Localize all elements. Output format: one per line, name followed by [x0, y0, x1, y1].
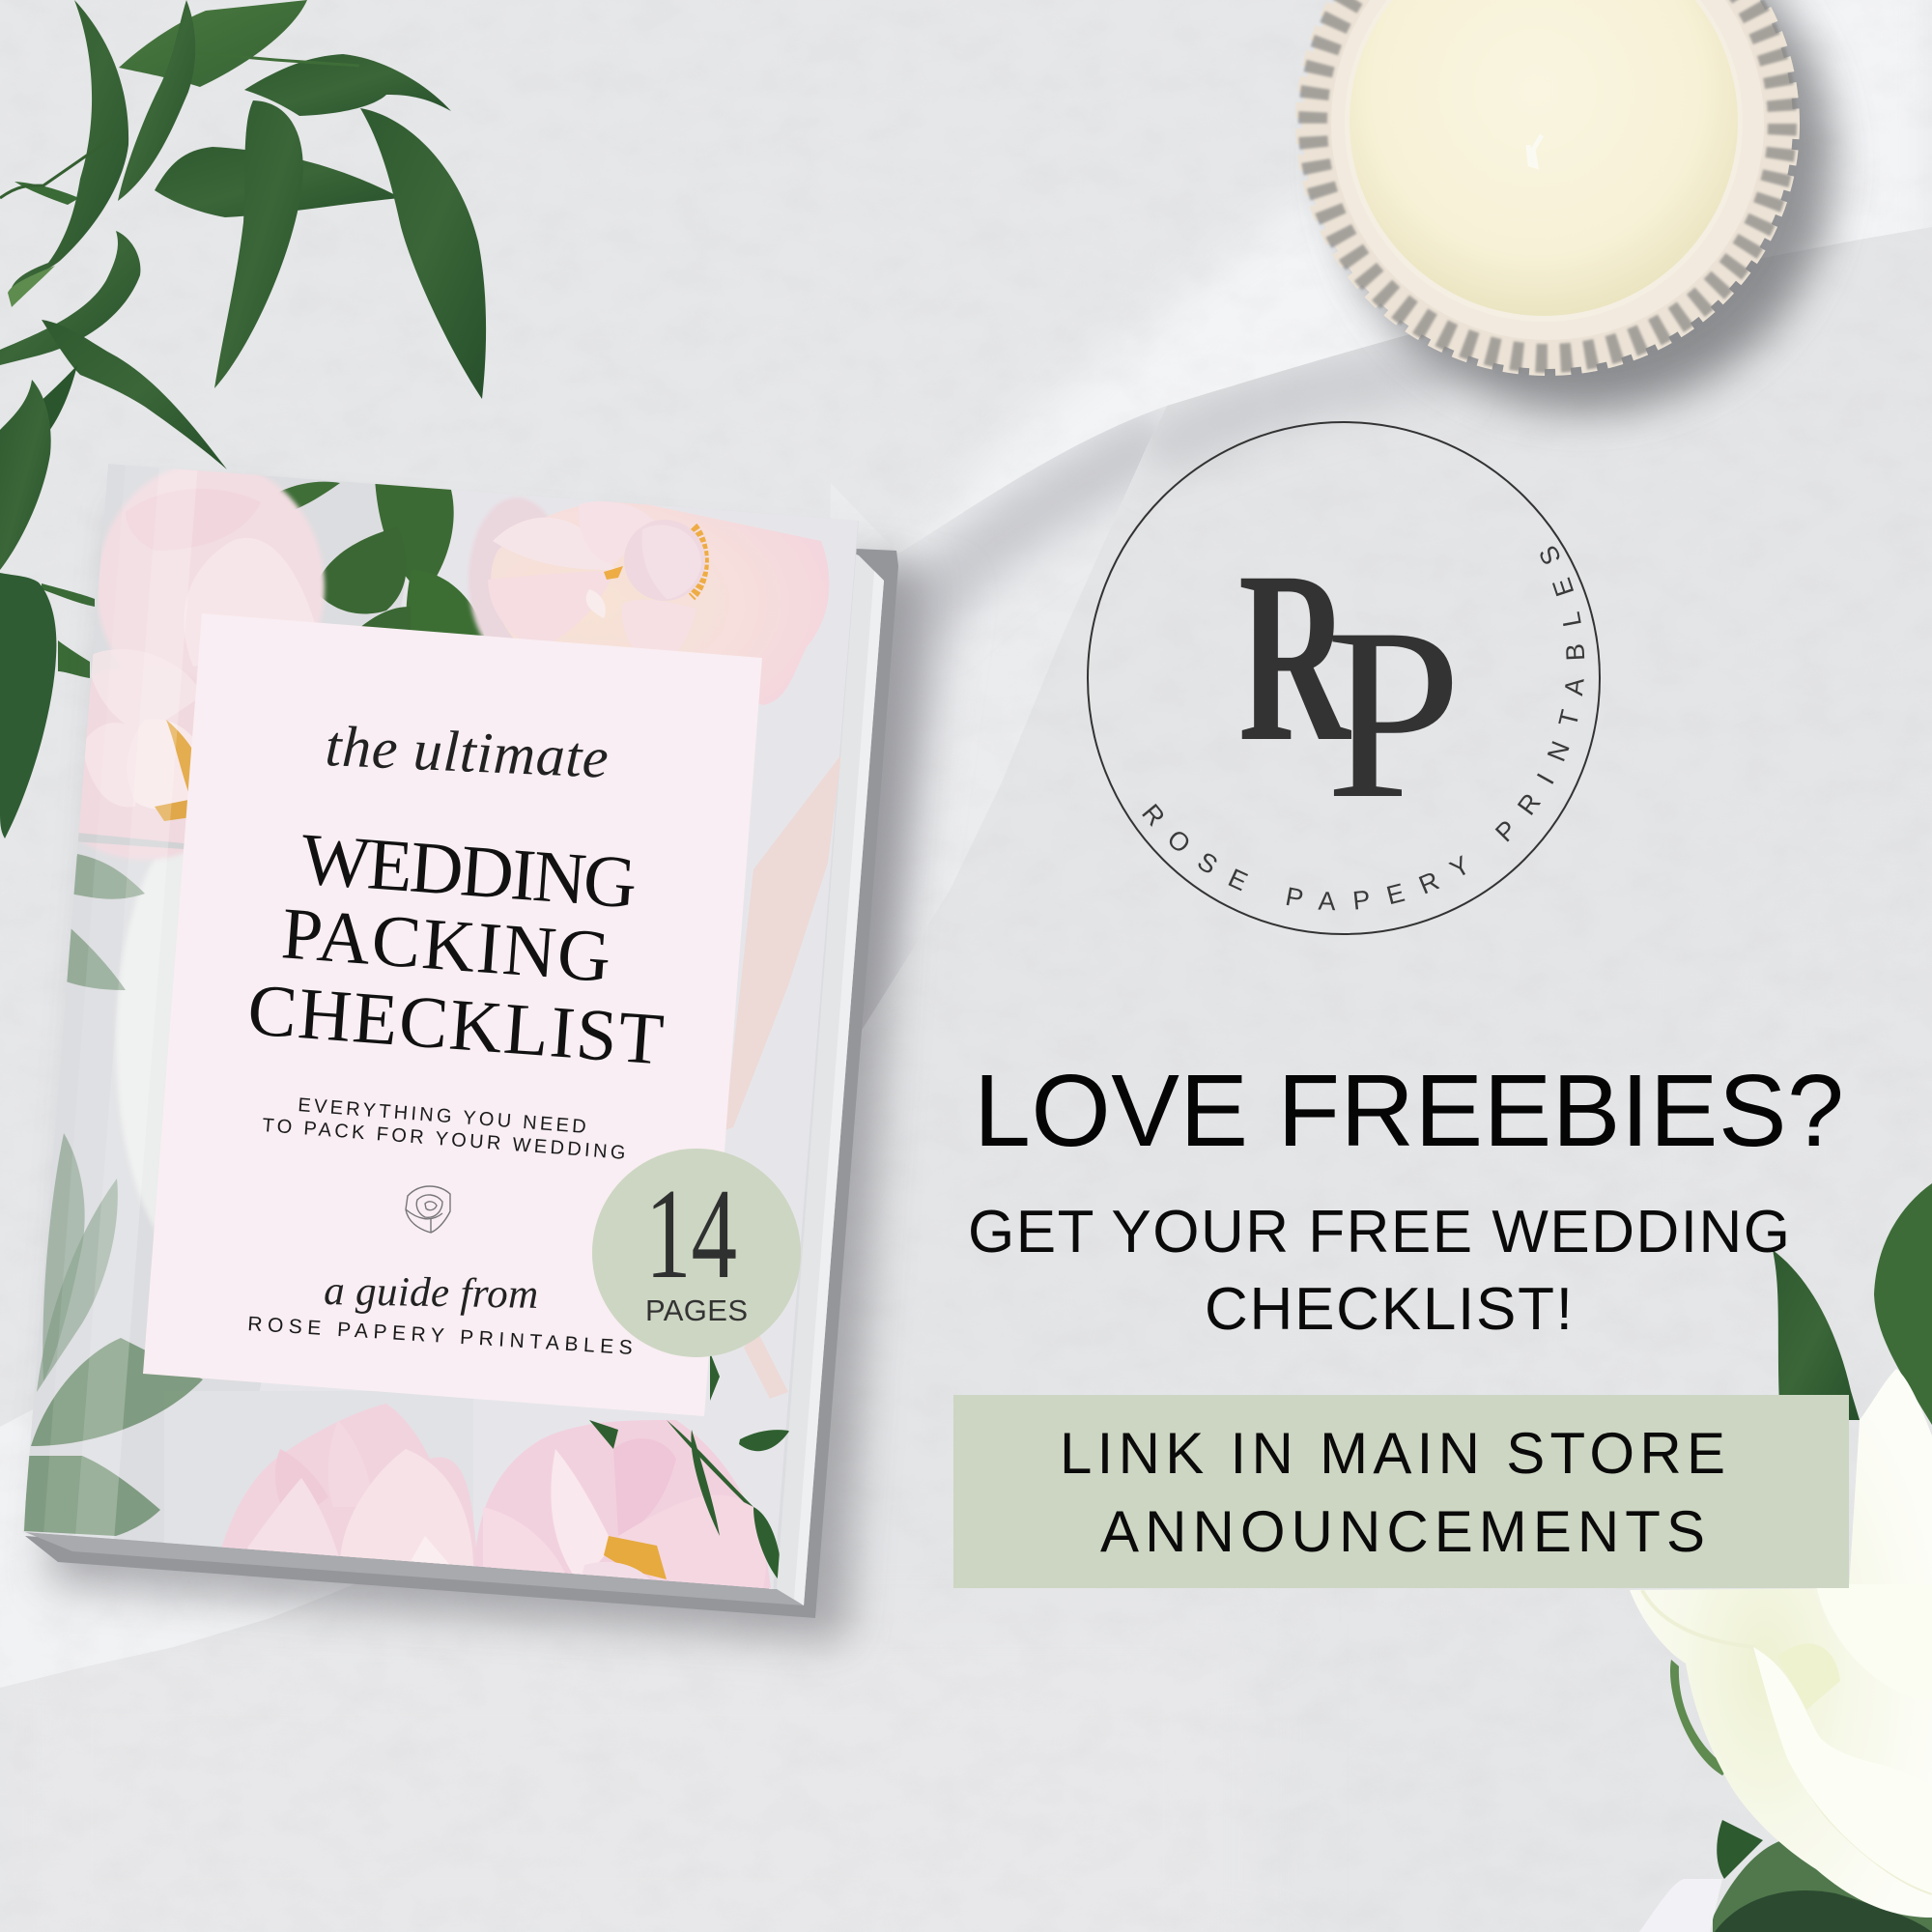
- badge: 14 pages: [592, 1149, 801, 1357]
- callout: link in main store: ANNOUNCEMENTS: [1100, 1499, 1705, 1564]
- lower background sheet: [1029, 228, 1932, 717]
- cover title: Wedding Packing Checklist: CHECKLIST: [245, 969, 667, 1081]
- cover title: Wedding Packing Checklist: PACKING: [279, 893, 613, 998]
- cover: sage leaves left: [24, 854, 203, 1536]
- cover: green sprig bottom right: [589, 1352, 794, 1584]
- cover panel: pale pink label: [143, 613, 762, 1416]
- cover title: Wedding Packing Checklist: WEDDING: [298, 818, 639, 923]
- cover title: Wedding Packing Checklist: [245, 818, 667, 1081]
- logo: Rose Papery Printables: P: [1325, 578, 1462, 849]
- cover: top left peony: [78, 469, 328, 860]
- cover: green leaves top: [279, 481, 485, 636]
- subheading: free wedding checklist: CHECKLIST!: [1205, 1276, 1573, 1343]
- cover: bottom peonies: [216, 1404, 771, 1589]
- paper ribbon fold: [862, 406, 1167, 1030]
- cover: pink ribbon: [724, 754, 841, 1399]
- subheading: free wedding checklist: GET YOUR FREE WEDDING: [968, 1199, 1790, 1265]
- logo: Rose Papery Printables: [1087, 421, 1601, 935]
- logo: Rose Papery Printables: ROSE PAPERY PRINTABLES: [1142, 547, 1584, 910]
- book shadow: [48, 502, 918, 1642]
- candle shadow: [1335, 0, 1833, 412]
- cover subtitle: TO PACK FOR YOUR WEDDING: [262, 1115, 626, 1164]
- icon: rose: [406, 1186, 450, 1233]
- cover text: a guide from: a guide from: [324, 1268, 539, 1318]
- top left foliage: [0, 0, 486, 838]
- heading: love freebies: LOVE FREEBIES?: [974, 1054, 1844, 1168]
- cover text: publisher: ROSE PAPERY PRINTABLES: [247, 1313, 633, 1359]
- lower left ribbon: [0, 1391, 406, 1688]
- subheading: free wedding checklist: [968, 1199, 1790, 1343]
- candle: [1300, 0, 1795, 371]
- logo: Rose Papery Printables: R: [1238, 521, 1352, 792]
- book back cover and spine: [25, 549, 898, 1618]
- cover subtitle: EVERYTHING YOU NEED: [298, 1094, 586, 1138]
- callout: link in main store: LINK IN MAIN STORE: [1060, 1421, 1725, 1486]
- book cover: [23, 462, 859, 1594]
- cover: white plaster background: [116, 473, 859, 1594]
- callout: link in main store: [953, 1395, 1849, 1588]
- badge: 14 pages: PAGES: [645, 1293, 748, 1327]
- book pages: [769, 551, 884, 1605]
- cover: spine highlight: [43, 464, 198, 1541]
- bottom right flower leaves: [1670, 1183, 1932, 1932]
- badge: 14 pages: 14: [645, 1162, 737, 1305]
- cover: top right peony: [469, 497, 829, 705]
- cover text: the ultimate: the ultimate: [324, 714, 610, 790]
- white flower: [1630, 1369, 1932, 1932]
